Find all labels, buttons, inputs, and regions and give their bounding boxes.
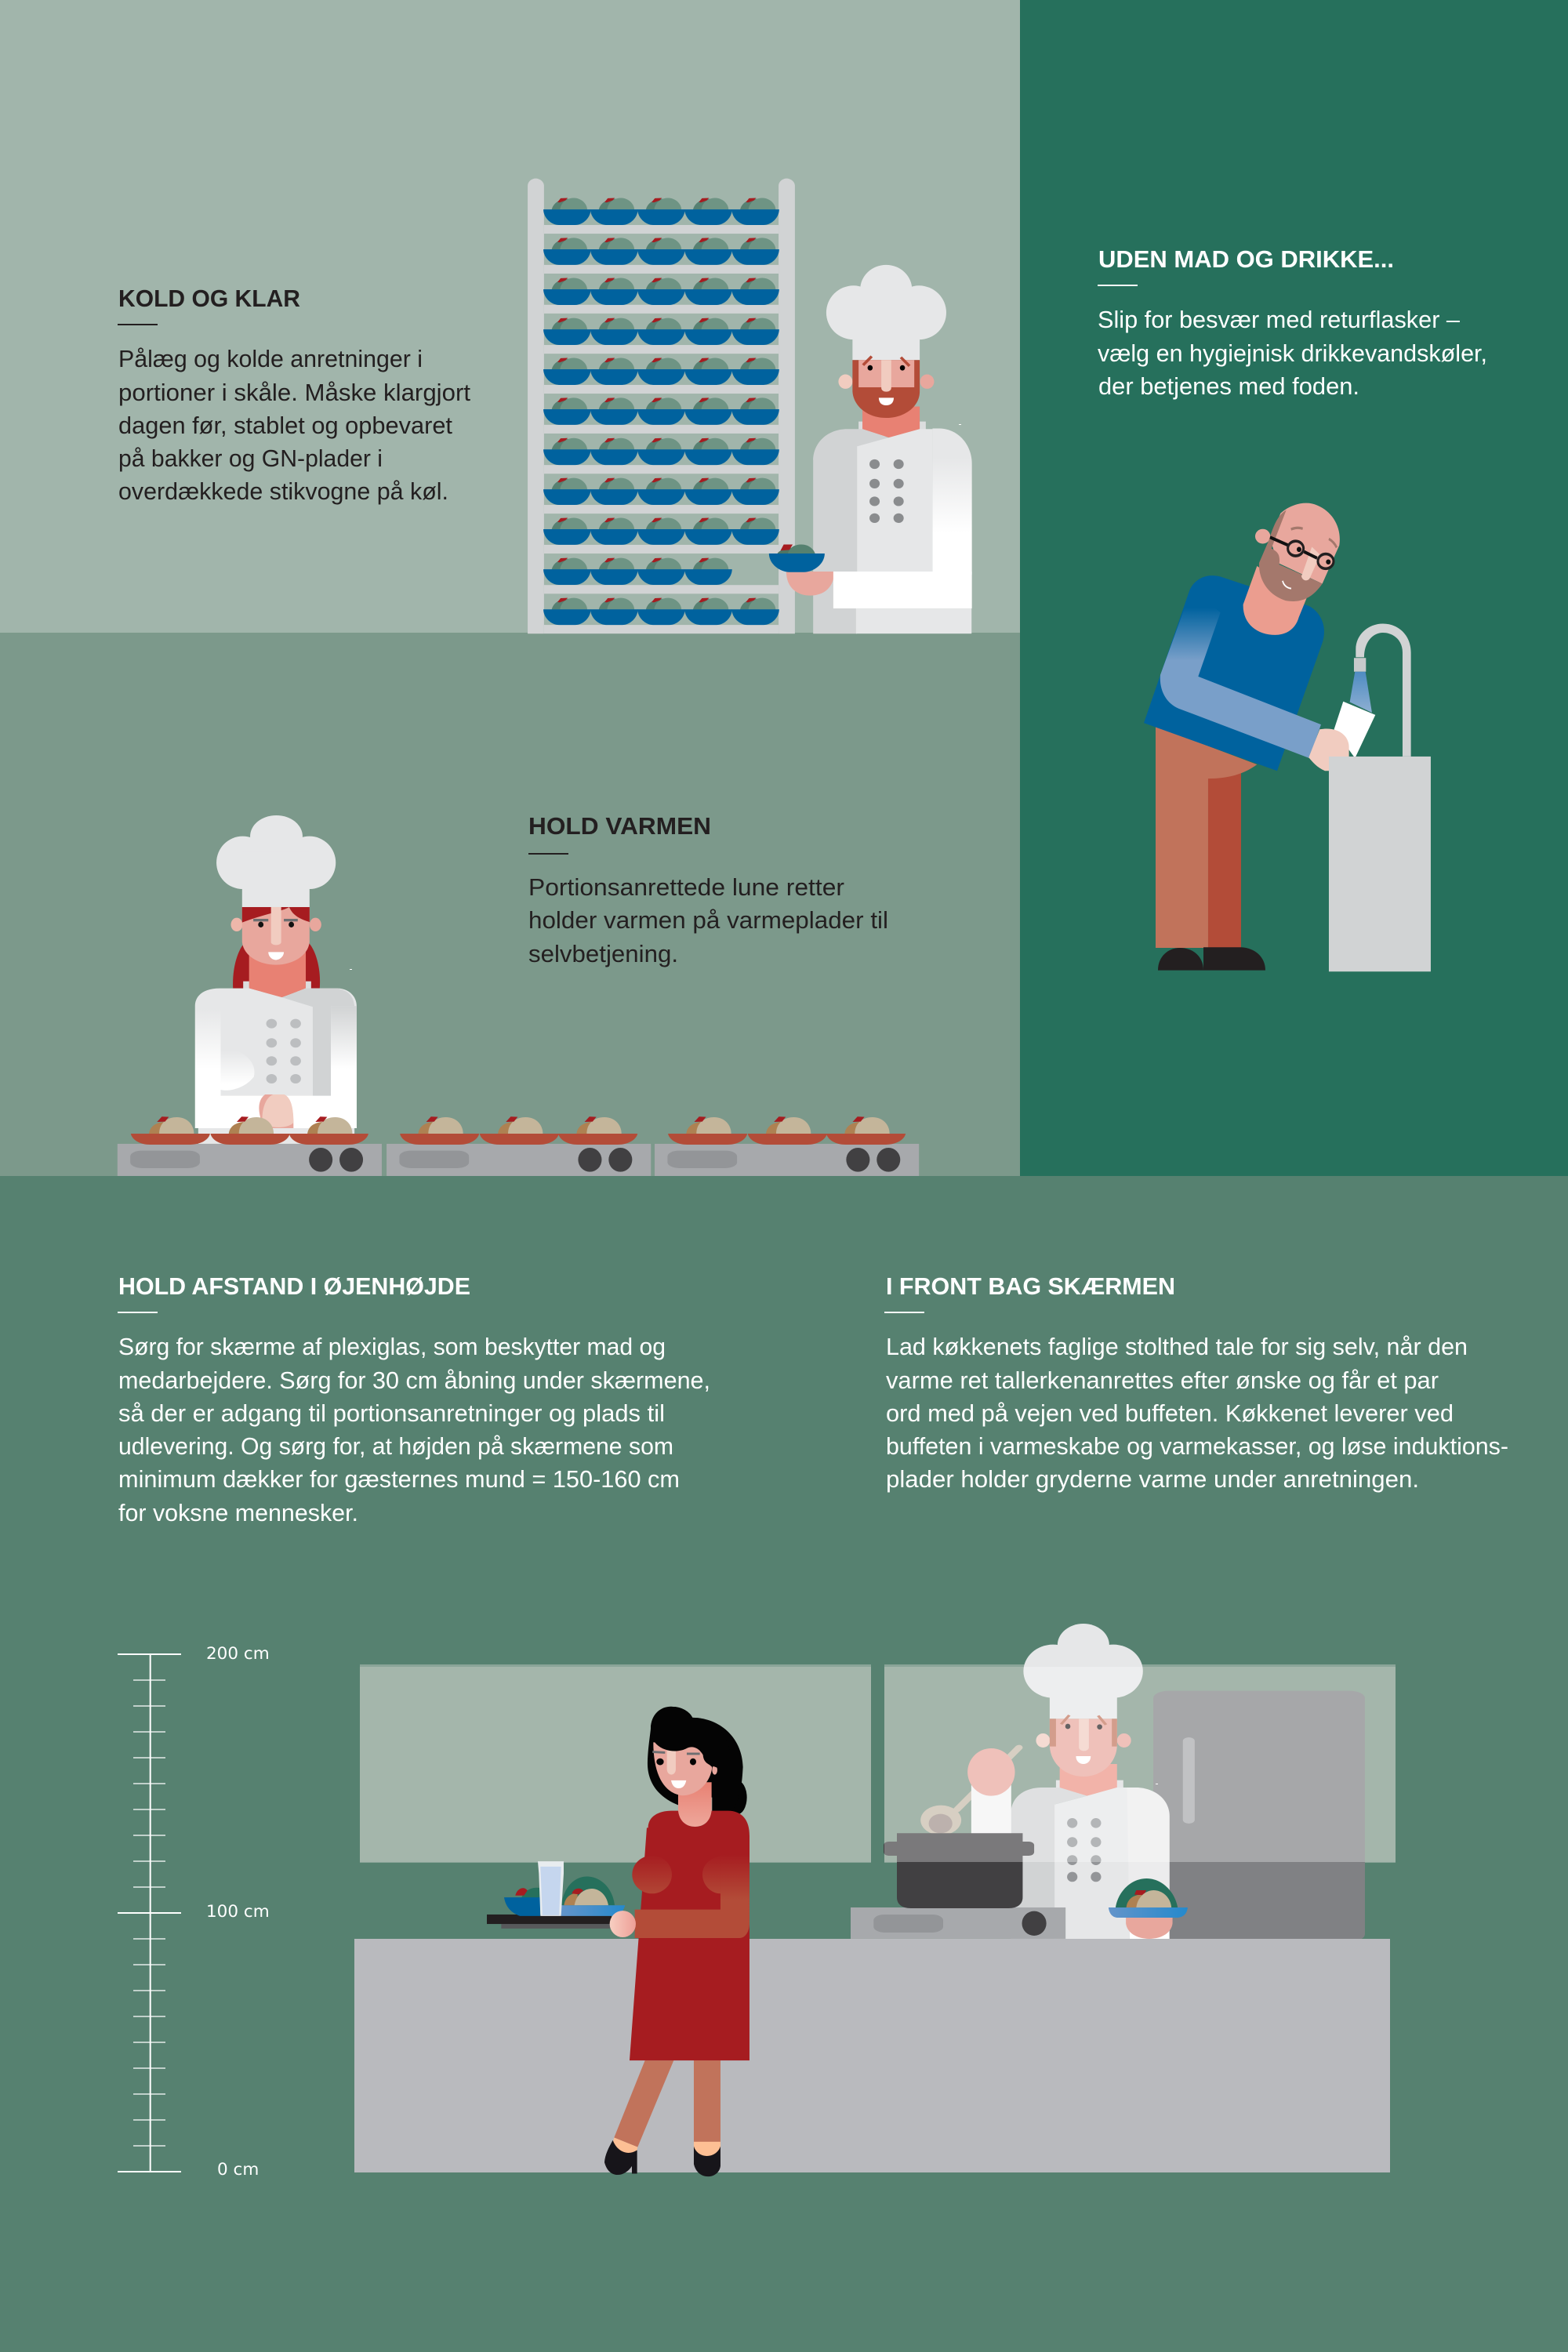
heading: Uden mad og drikke: UDEN MAD OG DRIKKE... bbox=[1098, 246, 1394, 273]
chef hat bbox=[826, 265, 946, 360]
cooler cabinet bbox=[1329, 757, 1431, 971]
body text: Kold og klar: på bakker og GN-plader i bbox=[118, 445, 383, 472]
chef face bbox=[838, 357, 934, 437]
hand bbox=[1308, 728, 1349, 771]
body text: Hold varmen bbox=[528, 873, 888, 967]
blue sweater bbox=[1144, 575, 1324, 771]
dish held by chef bbox=[1109, 1878, 1188, 1939]
heading: Hold varmen: HOLD VARMEN bbox=[528, 813, 711, 840]
body text: Hold afstand i øjenhøjde bbox=[118, 1333, 710, 1526]
spoon and raised arm bbox=[920, 1748, 1019, 1837]
ruler label: 0 cm: 0 cm bbox=[217, 2160, 259, 2180]
body text: Uden mad og drikke: vælg en hygiejnisk drikkevandskøler, bbox=[1098, 339, 1487, 367]
panel: screens section background bbox=[0, 1176, 1568, 2352]
body text: Uden mad og drikke: der betjenes med foden. bbox=[1098, 372, 1359, 400]
chef face bbox=[1036, 1715, 1131, 1796]
fridge bbox=[1153, 1691, 1365, 1942]
sleeve arm bbox=[1160, 589, 1321, 758]
hot plate 2 with dishes bbox=[387, 1116, 651, 1176]
body text: I front bag skærmen: ord med på vejen ved buffeten. Køkkenet leverer ved bbox=[886, 1399, 1454, 1427]
panel: hot section background bbox=[0, 633, 1020, 1176]
body text: Hold afstand i øjenhøjde: for voksne mennesker. bbox=[118, 1499, 358, 1526]
illustration: woman with tray bbox=[487, 1707, 750, 2176]
height ruler bbox=[118, 1644, 270, 2180]
hot plate 3 with dishes bbox=[655, 1116, 919, 1176]
hot plate 1 with dishes bbox=[118, 1116, 382, 1176]
kitchen scene behind right screen bbox=[851, 1624, 1396, 1942]
chef hat bbox=[1023, 1624, 1143, 1719]
heading: Kold og klar: KOLD OG KLAR bbox=[118, 285, 300, 312]
legs and shoes bbox=[604, 2060, 720, 2176]
stove bbox=[851, 1907, 1065, 1939]
body text: Hold afstand i øjenhøjde: medarbejdere. Sørg for 30 cm åbning under skærmene, bbox=[118, 1367, 710, 1394]
text block: Hold varmen bbox=[528, 813, 888, 967]
body text: I front bag skærmen: buffeten i varmeskabe og varmekasser, og løse induktions- bbox=[886, 1432, 1508, 1460]
body text: Kold og klar: Pålæg og kolde anretninger i bbox=[118, 345, 423, 372]
body text: I front bag skærmen: varme ret tallerkenanrettes efter ønske og får et par bbox=[886, 1367, 1439, 1394]
pot bbox=[884, 1833, 1034, 1908]
heading: I front bag skærmen: I FRONT BAG SKÆRMEN bbox=[886, 1273, 1175, 1300]
text block: Kold og klar bbox=[118, 285, 470, 505]
body text: Kold og klar bbox=[118, 345, 470, 505]
body text: Hold varmen: selvbetjening. bbox=[528, 940, 678, 967]
chef hat bbox=[216, 815, 336, 907]
body text: Kold og klar: overdækkede stikvogne på køl. bbox=[118, 477, 448, 505]
body text: Hold afstand i øjenhøjde: Sørg for skærme af plexiglas, som beskytter mad og bbox=[118, 1333, 666, 1360]
head bbox=[1255, 503, 1340, 601]
body text: Hold varmen: holder varmen på varmeplader til bbox=[528, 906, 888, 934]
illustration: bearded chef holding bowl bbox=[769, 265, 972, 633]
text block: I front bag skærmen bbox=[884, 1273, 1508, 1493]
panel: drinks section background bbox=[1020, 0, 1568, 1176]
red dress bbox=[630, 1811, 750, 2060]
tray with food and glass bbox=[487, 1861, 625, 1929]
body text: Kold og klar: portioner i skåle. Måske klargjort bbox=[118, 379, 470, 406]
body text: Hold afstand i øjenhøjde: minimum dækker for gæsternes mund = 150-160 cm bbox=[118, 1465, 680, 1493]
neck bbox=[678, 1782, 712, 1827]
hair back bbox=[648, 1707, 747, 1814]
panel: cold section background bbox=[0, 0, 1020, 633]
body text: Uden mad og drikke: Slip for besvær med returflasker – bbox=[1098, 306, 1461, 333]
illustration: female chef behind hot plates bbox=[195, 815, 357, 1144]
bowl held by chef bbox=[769, 545, 825, 572]
heading: Hold afstand i øjenhøjde: HOLD AFSTAND I ØJENHØJDE bbox=[118, 1273, 470, 1300]
chef jacket bbox=[195, 989, 357, 1144]
illustration: trolley rack with bowls bbox=[528, 179, 795, 633]
body text: Hold afstand i øjenhøjde: udlevering. Og sørg for, at højden på skærmene som bbox=[118, 1432, 673, 1460]
face bbox=[652, 1742, 717, 1795]
ruler label: 100 cm: 100 cm bbox=[206, 1902, 270, 1922]
body text: Kold og klar: dagen før, stablet og opbevaret bbox=[118, 412, 452, 439]
trousers and shoes bbox=[1156, 726, 1265, 971]
plexiglass screen left bbox=[360, 1664, 871, 1863]
body text: I front bag skærmen bbox=[886, 1333, 1508, 1493]
body text: I front bag skærmen: Lad køkkenets faglige stolthed tale for sig selv, når den bbox=[886, 1333, 1468, 1360]
water cooler bbox=[1334, 624, 1411, 758]
illustration: man at water cooler bbox=[1144, 503, 1431, 971]
ruler label: 200 cm: 200 cm bbox=[206, 1644, 270, 1664]
body text: Uden mad og drikke bbox=[1098, 306, 1487, 400]
chef face bbox=[230, 907, 321, 997]
chef jacket bbox=[786, 428, 972, 633]
neck bbox=[1243, 566, 1307, 635]
plexiglass screen right overlay bbox=[884, 1667, 1396, 1862]
hand bbox=[610, 1911, 636, 1937]
hair fringe bbox=[651, 1707, 731, 1768]
chef jacket bbox=[1011, 1788, 1170, 1939]
body text: Hold varmen: Portionsanrettede lune retter bbox=[528, 873, 844, 901]
body text: I front bag skærmen: plader holder gryderne varme under anretningen. bbox=[886, 1465, 1419, 1493]
body text: Hold afstand i øjenhøjde: så der er adgang til portionsanretninger og plads til bbox=[118, 1399, 665, 1427]
counter bbox=[354, 1939, 1390, 2172]
text block: Uden mad og drikke bbox=[1098, 246, 1487, 400]
text block: Hold afstand i øjenhøjde bbox=[118, 1273, 710, 1526]
